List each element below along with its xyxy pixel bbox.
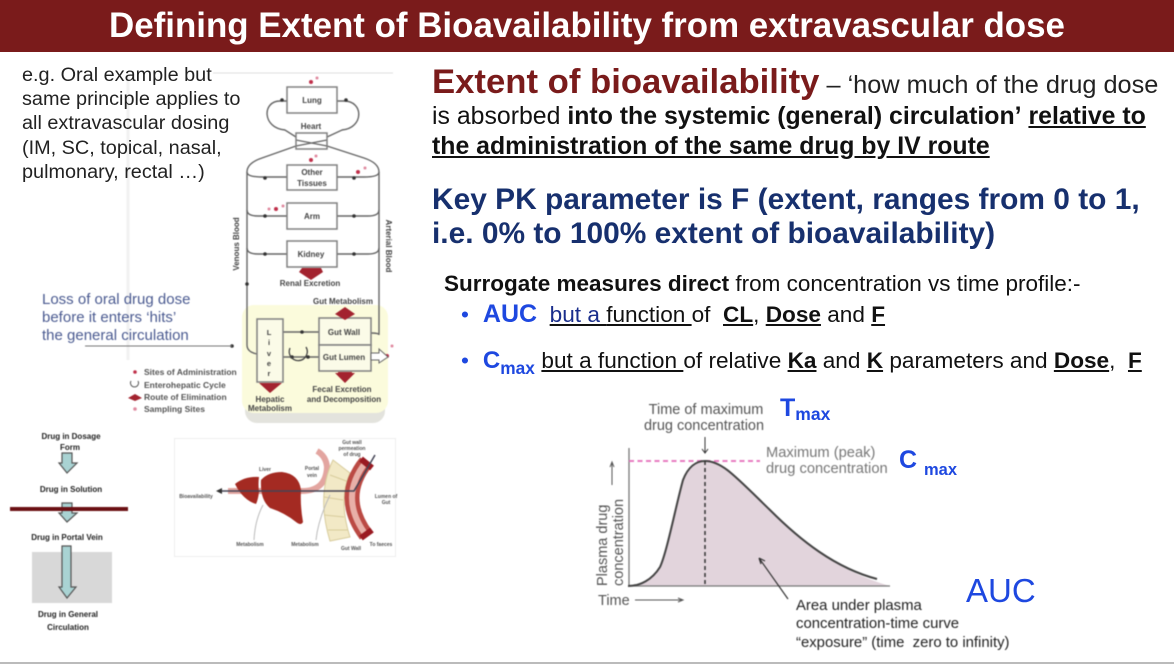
axis labels: Plasma drug [595, 505, 611, 586]
liver [235, 472, 303, 524]
title banner [0, 0, 1174, 52]
labels: Kidney [298, 250, 325, 259]
labels: Metabolism [248, 404, 292, 413]
labels: e [267, 359, 271, 368]
site markers [268, 76, 394, 358]
definition text [432, 103, 1146, 160]
stage labels: Drug in Portal Vein [31, 533, 103, 542]
illustration labels: Metabolism [236, 542, 264, 548]
illustration labels: Gut Wall [341, 546, 362, 552]
illustration labels: To faeces [370, 542, 393, 548]
title banner: Defining Extent of Bioavailability from extravascular dose [109, 6, 1065, 45]
membrane line [10, 507, 128, 511]
labels: Hepatic [256, 395, 285, 404]
note: oral example: same principle applies to [22, 88, 240, 110]
legend: Enterohepatic Cycle [144, 380, 226, 390]
labels: v [267, 349, 272, 358]
labels: Venous Blood [232, 217, 241, 271]
note: loss of oral dose: before it enters ‘hits’ [42, 309, 176, 326]
labels: Gut Lumen [323, 353, 365, 362]
stage labels: Drug in General [38, 610, 98, 619]
dose arrow [371, 349, 388, 363]
illustration labels: vein [307, 473, 317, 479]
axis labels: Time [598, 593, 630, 609]
heading: extent of bioavailability: Extent of bioavailability – ‘how much of the drug dose [432, 63, 1158, 101]
note: loss of oral dose: the general circulation [42, 327, 189, 344]
drug path [218, 455, 375, 491]
concentration time chart: drug concentration [766, 461, 888, 477]
bottom edge [0, 662, 1174, 664]
key PK parameter text: Key PK parameter is F (extent, ranges from 0 to 1, [432, 183, 1140, 216]
liver and gut illustration [174, 438, 398, 556]
elimination arrows [128, 268, 355, 401]
chart annotations: Time of maximum [649, 402, 763, 418]
note: loss of oral dose [42, 291, 190, 344]
concentration time chart: Area under plasma [796, 598, 923, 614]
labels: Fecal Excretion [312, 385, 372, 394]
labels: Other [301, 168, 323, 177]
labels: Renal Excretion [280, 279, 340, 288]
key PK parameter text [432, 183, 1140, 250]
area under curve [628, 461, 890, 586]
organ flow lines [247, 101, 379, 357]
illustration labels [179, 440, 398, 552]
labels: Heart [301, 122, 322, 131]
chart annotations [644, 402, 764, 434]
stage labels: Form [60, 443, 80, 452]
illustration labels: Liver [259, 467, 271, 473]
labels: L [267, 328, 272, 337]
bullet: AUC: • AUC but a function of CL, Dose and F [461, 300, 885, 328]
surrogate measures heading: Surrogate measures direct from concentration vs time profile:- [444, 271, 1081, 296]
labels [232, 96, 393, 413]
portal vein [228, 451, 327, 491]
labels: Tissues [297, 179, 327, 188]
legend: Sampling Sites [144, 404, 205, 414]
stage labels: Circulation [47, 623, 89, 632]
chart annotations: drug concentration [644, 418, 764, 434]
flow dots [230, 98, 356, 359]
legend: Route of Elimination [144, 392, 227, 402]
gut lumen [352, 462, 366, 535]
Tmax label: Tmax [780, 394, 830, 424]
gut wall [324, 460, 350, 541]
note: oral example: all extravascular dosing [22, 112, 229, 134]
definition text: the administration of the same drug by IV route [432, 133, 990, 160]
note: oral example [22, 64, 240, 183]
illustration labels: Lumen of [375, 494, 398, 500]
note: oral example: e.g. Oral example but [22, 64, 212, 86]
AUC label: AUC [966, 572, 1036, 609]
flow arrows [59, 453, 77, 598]
labels: i [268, 338, 270, 347]
stage labels [31, 432, 103, 632]
stage labels: Drug in Dosage [41, 432, 101, 441]
axis labels [595, 499, 630, 609]
note: loss of oral dose: Loss of oral drug dose [42, 291, 190, 308]
liver backdrop [32, 552, 112, 603]
concentration time chart: concentration-time curve [796, 616, 959, 632]
axis arrows [610, 462, 683, 602]
labels: and Decomposition [307, 395, 381, 404]
legend: Sites of Administration [144, 367, 237, 377]
legend [130, 367, 237, 414]
labels: r [268, 369, 271, 378]
concentration time chart: “exposure” (time zero to infinity) [796, 635, 1010, 651]
bullet: Cmax: • Cmax but a function of relative Ka and K parameters and Dose, F [461, 347, 1142, 378]
Cmax label: C max [899, 446, 957, 479]
illustration labels: Gut [382, 500, 391, 506]
tmax dashed line [704, 461, 706, 586]
illustration labels: Gut wall [342, 440, 362, 446]
pointer line [85, 345, 232, 347]
concentration curve [628, 461, 877, 586]
definition text: is absorbed into the systemic (general) circulation’ relative to [432, 103, 1146, 130]
note: oral example: (IM, SC, topical, nasal, [22, 137, 222, 159]
key PK parameter text: i.e. 0% to 100% extent of bioavailability) [432, 217, 995, 250]
illustration labels: of drug [343, 452, 361, 458]
yellow gut and liver region [242, 305, 388, 423]
cycle icon [289, 347, 307, 361]
axes [629, 448, 890, 586]
labels: Arm [304, 212, 320, 221]
note: oral example: pulmonary, rectal …) [22, 161, 205, 183]
cmax dashed line [629, 460, 760, 462]
labels: Lung [302, 96, 322, 105]
tmax pointer [702, 437, 708, 453]
organ boxes [257, 87, 371, 382]
AUC pointer [759, 558, 788, 599]
axis labels: concentration [611, 499, 627, 586]
illustration labels: Portal [305, 466, 320, 472]
illustration labels: Metabolism [291, 542, 319, 548]
labels: Gut Wall [328, 328, 360, 337]
illustration labels: Bioavailability [179, 494, 213, 500]
stage labels: Drug in Solution [40, 485, 102, 494]
concentration time chart: Maximum (peak) [766, 445, 875, 461]
labels: Gut Metabolism [313, 297, 373, 306]
illustration labels: permeation [339, 446, 365, 452]
labels: Arterial Blood [384, 220, 393, 273]
